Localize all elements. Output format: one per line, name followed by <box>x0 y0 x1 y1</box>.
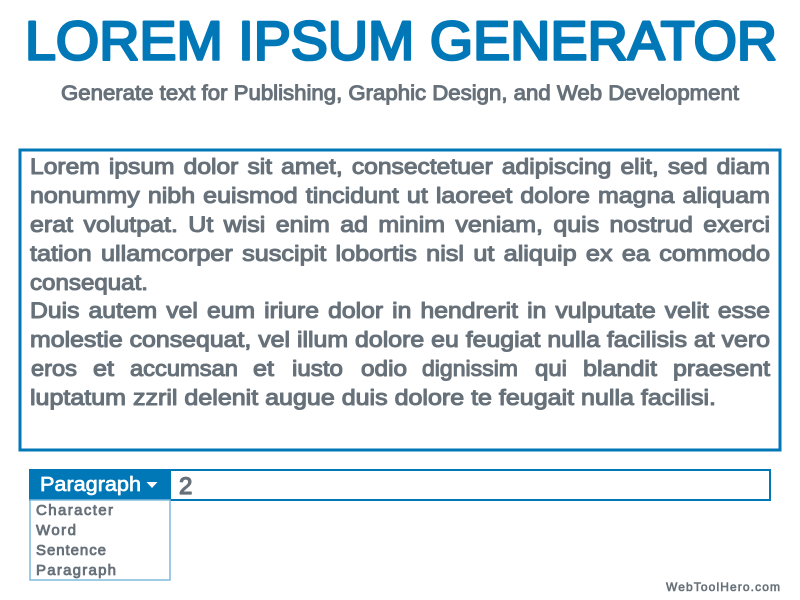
text block: second paragraph: odio <box>361 356 407 381</box>
text block: second paragraph: eros <box>31 356 77 381</box>
text block: second paragraph: blandit <box>583 356 657 381</box>
dropdown menu: Character <box>36 502 113 519</box>
text block: second paragraph: accumsan <box>130 356 238 381</box>
text block: second paragraph: et <box>253 356 274 381</box>
text block: second paragraph: molestie consequat, vel illum dolore eu feugiat nulla facilisis at vero <box>30 327 770 352</box>
text block: second paragraph: Duis autem vel eum iriure dolor in hendrerit in vulputate velit esse <box>30 298 770 323</box>
icon: caret <box>146 482 158 488</box>
dropdown menu: Word <box>36 522 76 539</box>
text block: second paragraph: dignissim <box>422 356 518 381</box>
text block: first paragraph: erat volutpat. Ut wisi enim ad minim veniam, quis nostrud exerci <box>30 212 770 237</box>
text block: second paragraph <box>30 298 770 410</box>
dropdown menu: Paragraph <box>36 562 116 579</box>
text block: first paragraph <box>30 154 770 295</box>
text block: first paragraph: consequat. <box>30 270 148 295</box>
text block: first paragraph: tation ullamcorper suscipit lobortis nisl ut aliquip ex ea commodo <box>30 241 770 266</box>
text block: first paragraph: nonummy nibh euismod tincidunt ut laoreet dolore magna aliquam <box>30 183 770 208</box>
dropdown button: Paragraph <box>40 474 141 496</box>
subtitle: Generate text for Publishing, Graphic Design, and Web Development <box>61 82 739 105</box>
text block: second paragraph: iusto <box>292 356 343 381</box>
dropdown menu: Sentence <box>36 542 106 559</box>
text block: second paragraph: qui <box>535 356 567 381</box>
number input: 2 <box>179 473 192 500</box>
title: LOREM IPSUM GENERATOR <box>25 10 777 72</box>
dropdown button <box>29 469 171 501</box>
text block: first paragraph: Lorem ipsum dolor sit amet, consectetuer adipiscing elit, sed diam <box>30 154 770 179</box>
number input <box>30 470 770 500</box>
text block: second paragraph: luptatum zzril delenit augue duis dolore te feugait nulla facilisi. <box>30 385 716 410</box>
text block: second paragraph: praesent <box>673 356 770 381</box>
dropdown menu <box>30 500 170 580</box>
attribution: WebToolHero.com <box>666 580 780 594</box>
panel: generated text box <box>20 150 780 450</box>
text block: second paragraph: et <box>93 356 114 381</box>
